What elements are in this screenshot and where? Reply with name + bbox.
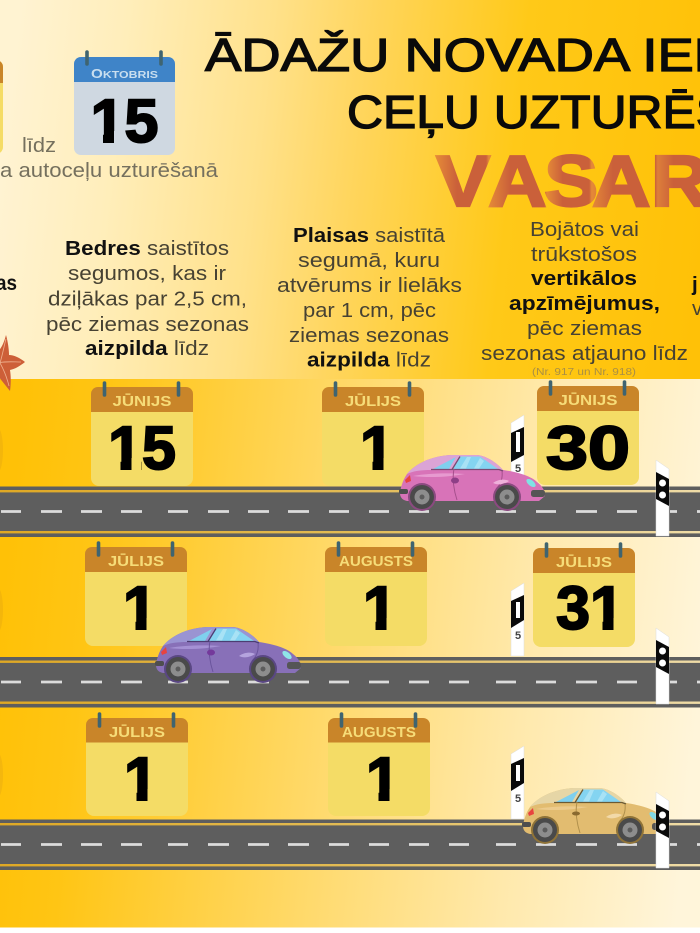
lower background: [0, 379, 700, 928]
road marker post: row 2: [511, 583, 524, 656]
car: purple: [155, 627, 301, 683]
road marker post: row 1: [511, 415, 524, 487]
text: Plaisas: Plaisas saistītā: [293, 224, 446, 247]
calendar: 30 Jūnijs: 30: [546, 414, 630, 482]
calendar: 30 Jūnijs: JŪNIJS: [558, 392, 618, 409]
calendar: 15 Jūnijs: [91, 383, 193, 486]
calendar: 15 Jūnijs: JŪNIJS: [112, 393, 172, 410]
calendar: row 2 1 Jūlijs: [85, 543, 187, 646]
road: row 2: [0, 657, 700, 708]
calendar: clipped at left edge: [0, 60, 3, 154]
calendar: row 2 31 Jūlijs: 31: [556, 574, 624, 642]
road marker post: row 3: [511, 746, 524, 819]
calendar: 30 Jūnijs: [537, 382, 639, 485]
text: autoceļu uzturēšanā: a autoceļu uzturēšanā: [0, 159, 219, 182]
road delineator: row 1: [656, 460, 669, 536]
calendar: row 3 1 Jūlijs: [86, 714, 188, 816]
text: vertikālie apzīmējumi: trūkstošos: [531, 243, 637, 266]
text: Plaisas: par 1 cm, pēc: [303, 299, 436, 322]
calendar: row 3 1 Augusts: 1: [366, 745, 400, 813]
calendar: 15 Jūnijs: 15: [108, 414, 176, 482]
title: ĀDAŽU NOVADA IEL: [205, 29, 700, 81]
road delineator: row 2: [656, 628, 669, 704]
text: vertikālie apzīmējumi: apzīmējumus,: [509, 292, 660, 315]
clipped text: right column: j: [691, 273, 698, 296]
text: Bedres: dziļākas par 2,5 cm,: [48, 288, 247, 310]
calendar: 15 Oktobris: OKTOBRIS: [91, 66, 158, 81]
text: Plaisas: aizpilda līdz: [307, 348, 431, 372]
text: Bedres: Bedres saistītos: [65, 237, 229, 260]
icon: autumn leaf: [0, 335, 25, 391]
text: Bedres: segumos, kas ir: [68, 262, 226, 285]
road: row 3: [0, 820, 700, 870]
text: Plaisas: [277, 224, 462, 372]
calendar: row 3 1 Augusts: AUGUSTS: [342, 725, 416, 741]
calendar: row 3 1 Jūlijs: JŪLIJS: [109, 724, 165, 741]
calendar: row 2 1 Augusts: 1: [363, 574, 397, 642]
calendar: row 2 1 Augusts: AUGUSTS: [339, 554, 413, 570]
text: Bedres: aizpilda līdz: [85, 337, 209, 360]
text: vertikālie apzīmējumi: (Nr. 917 un Nr. 918): [532, 366, 636, 378]
text: Bedres: pēc ziemas sezonas: [46, 313, 249, 336]
text: vertikālie apzīmējumi: vertikālos: [531, 267, 637, 290]
calendar: row 2 1 Jūlijs: JŪLIJS: [108, 553, 164, 570]
text: Plaisas: segumā, kuru: [298, 249, 440, 272]
text: vertikālie apzīmējumi: pēc ziemas: [527, 317, 642, 340]
title: CEĻU UZTURĒŠ: [347, 86, 700, 138]
clipped text: right column: [691, 273, 700, 320]
text: vertikālie apzīmējumi: sezonas atjauno līdz: [481, 342, 688, 365]
calendar: 1 Jūlijs: JŪLIJS: [345, 393, 401, 410]
calendar: row 2 1 Augusts: [325, 543, 427, 646]
text: Plaisas: atvērums ir lielāks: [277, 274, 462, 297]
road: row 1: [0, 486, 700, 537]
road marker post: row 1: 5: [515, 463, 521, 475]
calendar: 1 Jūlijs: [322, 383, 424, 486]
calendar: row 3 1 Jūlijs: 1: [124, 745, 158, 813]
calendar: row 2 1 Jūlijs: 1: [123, 574, 157, 642]
edge shadows: [0, 428, 3, 797]
road delineator: row 3: [656, 792, 669, 868]
text: vertikālie apzīmējumi: Bojātos vai: [530, 218, 639, 241]
text: līdz: līdz: [22, 134, 56, 157]
road marker post: row 2: 5: [515, 630, 521, 642]
title: [205, 29, 700, 138]
calendar: 1 Jūlijs: 1: [360, 414, 394, 482]
text: Plaisas: ziemas sezonas: [289, 324, 449, 347]
road marker post: row 3: 5: [515, 793, 521, 805]
calendar: row 2 31 Jūlijs: JŪLIJS: [556, 554, 612, 571]
calendar: 15 Oktobris: 15: [91, 87, 158, 155]
calendar: row 3 1 Augusts: [328, 714, 430, 816]
car: pink: [399, 455, 545, 511]
car: beige: [522, 788, 668, 844]
calendar: row 2 31 Jūlijs: [533, 544, 635, 647]
upper background: [0, 0, 700, 379]
text: vertikālie apzīmējumi: [481, 218, 688, 378]
text: Bedres: [46, 237, 249, 360]
calendar: 15 Oktobris: [74, 52, 175, 155]
